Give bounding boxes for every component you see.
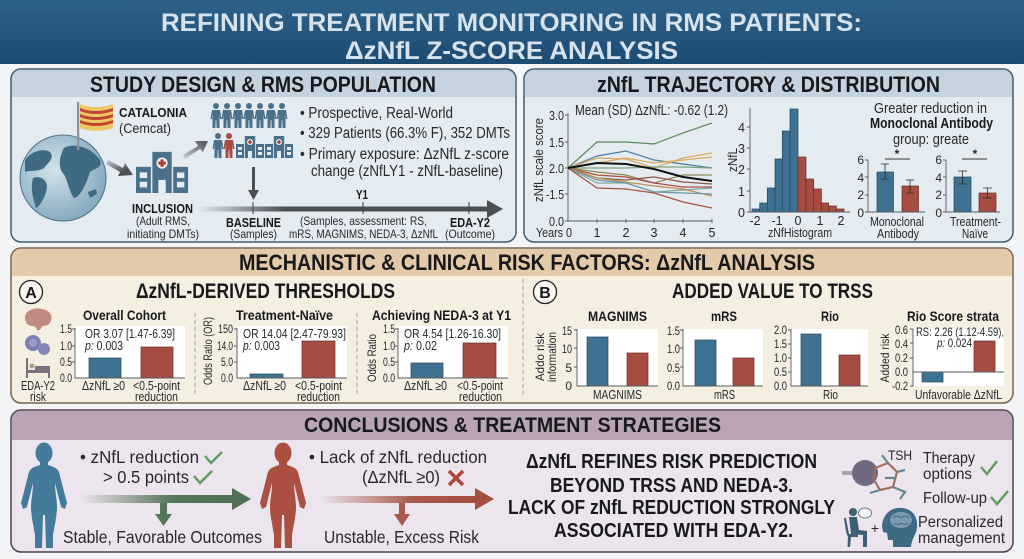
badge A <box>20 280 42 304</box>
bar chart: monoclonal antibody: 0 <box>857 206 864 220</box>
chart: overall cohort: 0.0 <box>60 371 72 385</box>
text: study characteristics: change (zNfLY1 - zNfL-baseline) <box>311 163 503 180</box>
text: baseline: (Samples) <box>230 227 277 241</box>
text: key conclusion: LACK OF zNfL REDUCTION STRONGLY <box>508 496 835 519</box>
text: Catalonia <box>119 105 188 136</box>
histogram: zNfL distribution: 1 <box>817 214 824 228</box>
histogram: zNfL distribution: 0 <box>738 206 745 220</box>
icon: patient in chair <box>844 508 872 547</box>
text: key conclusion: ΔzNfL REFINES RISK PREDICTION <box>526 450 817 473</box>
chart: mRS: 0.0 <box>667 379 680 393</box>
chart: overall cohort: Overall Cohort <box>83 307 166 323</box>
arrow: patients to baseline <box>248 167 259 200</box>
text: inclusion: INCLUSION <box>132 201 193 216</box>
chart: Rio score strata: 0.2 <box>895 351 908 365</box>
chart: treatment-naive odds: 0.0 <box>221 371 233 385</box>
panel: study design and RMS population <box>11 69 516 242</box>
bar chart: treatment-naive <box>935 147 1001 241</box>
histogram: zNfL distribution: zNfL <box>726 148 740 172</box>
chart: MAGNIMS: MAGNIMS <box>593 388 642 402</box>
bar chart: treatment-naive: Naïve <box>962 227 988 241</box>
line chart: zNfL trajectories: Mean (SD) ΔzNfL: -0.62 (1.2) <box>575 103 728 119</box>
bar chart: monoclonal antibody: Monoclonal <box>870 215 924 229</box>
chart: achieving NEDA-3 at Y1: <0.5-point <box>457 379 503 393</box>
text: study characteristics: • Prospective, Real-World <box>300 105 453 122</box>
chart: achieving NEDA-3 at Y1: p: 0.02 <box>403 339 437 353</box>
chart: Rio: Rio <box>821 308 839 324</box>
line chart: zNfL trajectories: 2.0 <box>549 161 564 176</box>
chart: Rio: Rio <box>823 388 838 402</box>
text: inclusion <box>127 201 199 241</box>
chart: MAGNIMS <box>533 308 658 402</box>
text: excess risk: Unstable, Excess Risk <box>324 527 479 547</box>
line chart: zNfL trajectories: -1.5 <box>546 187 564 202</box>
chart: achieving NEDA-3 at Y1: 0.0 <box>383 371 395 385</box>
text: plus: + <box>871 520 879 536</box>
text: greater reduction <box>870 101 993 148</box>
chart: treatment-naive odds: 150 <box>218 322 233 336</box>
heading: study design: STUDY DESIGN & RMS POPULATION <box>90 72 436 97</box>
chart: Rio: 0.5 <box>774 365 787 379</box>
chart: mRS: 1.5 <box>667 324 680 338</box>
histogram: zNfL distribution: zNfHistogram <box>768 226 832 240</box>
chart: Rio: 1.0 <box>774 351 787 365</box>
text: lack of reduction: (ΔzNfL ≥0) <box>362 467 440 487</box>
chart: MAGNIMS: 10 <box>562 342 572 356</box>
text: inclusion: (Adult RMS, <box>136 214 190 228</box>
chart: Rio score strata: 0.4 <box>895 337 908 351</box>
chart: overall cohort <box>60 307 185 404</box>
chart: overall cohort: <0.5-point <box>133 379 180 393</box>
chart: treatment-naive odds: Treatment-Naïve <box>236 307 333 323</box>
bar chart: monoclonal antibody: 4 <box>857 171 864 185</box>
badge B: B <box>539 285 551 302</box>
chart: achieving NEDA-3 at Y1: OR 4.54 [1.26-16.30] <box>404 327 501 341</box>
line chart: zNfL trajectories: 0.0 <box>549 214 564 229</box>
text: therapy options <box>923 450 997 483</box>
chart: mRS: 0.5 <box>667 361 680 375</box>
chart: mRS: mRS <box>711 308 737 324</box>
chart: treatment-naive odds: 5.0 <box>221 355 233 369</box>
chart: treatment-naive odds: Odds Ratio (OR) <box>201 317 215 385</box>
chart: achieving NEDA-3 at Y1: ΔzNfL ≥0 <box>404 379 447 393</box>
arrow: favorable path <box>80 488 251 526</box>
chart: overall cohort: 0.5 <box>60 355 72 369</box>
text: lack of reduction: • Lack of zNfL reduction <box>309 447 487 467</box>
histogram: zNfL distribution: 4 <box>738 121 745 135</box>
chart: treatment-naive odds: <0.5-point <box>295 379 342 393</box>
chart: MAGNIMS: information <box>545 332 559 382</box>
chart: MAGNIMS: Addo risk <box>533 332 547 381</box>
arrow: hospital to patients <box>183 141 208 159</box>
text: inclusion: initiating DMTs) <box>127 227 199 241</box>
bar chart: treatment-naive: 4 <box>935 171 942 185</box>
text: study characteristics <box>300 105 510 180</box>
text: therapy options: Therapy <box>923 450 975 467</box>
text: greater reduction: Monoclonal Antibody <box>870 116 993 132</box>
heading: added value: ADDED VALUE TO TRSS <box>672 280 873 303</box>
icon: Catalonia flag <box>77 102 113 150</box>
bar chart: treatment-naive: 0 <box>935 206 942 220</box>
text: zNfL reduction: • zNfL reduction <box>80 447 199 467</box>
chart: overall cohort: 1.5 <box>60 322 72 336</box>
panel: mechanistic and clinical risk factors <box>11 248 1013 404</box>
chart: MAGNIMS: 5 <box>565 361 572 375</box>
histogram: zNfL distribution: 0 <box>795 214 802 228</box>
text: favorable outcome: Stable, Favorable Outcomes <box>63 527 262 547</box>
chart: Rio score strata: Rio Score strata <box>907 308 999 324</box>
icon: patient group <box>210 103 293 158</box>
chart: achieving NEDA-3 at Y1: 1.5 <box>383 322 395 336</box>
text: Y1 assessments: (Samples, assessment: RS, <box>300 214 427 228</box>
chart: mRS: mRS <box>714 388 735 402</box>
chart: overall cohort: ΔzNfL ≥0 <box>82 379 125 393</box>
histogram: zNfL distribution: 2 <box>838 214 845 228</box>
text: lack of reduction <box>309 447 487 487</box>
icons: EDA-Y2 risk: risk <box>30 390 47 404</box>
chart: Rio: 0.0 <box>774 379 787 393</box>
bar chart: monoclonal antibody: 6 <box>857 153 864 167</box>
heading: conclusions: CONCLUSIONS & TREATMENT STRATEGIES <box>304 414 721 437</box>
text: Y1 assessments: Y1 <box>356 187 368 202</box>
title banner: REFINING TREATMENT MONITORING IN RMS PATIENTS: <box>161 9 862 37</box>
text: Catalonia: (Cemcat) <box>119 120 171 136</box>
arrow: globe to hospital <box>106 160 133 176</box>
line chart: zNfL trajectories: zNfL scale score <box>532 118 546 202</box>
chart: overall cohort: 1.0 <box>60 339 72 353</box>
text: personalized management: management <box>918 530 1006 547</box>
chart: treatment-naive odds: p: 0.003 <box>242 339 280 353</box>
arrow: excess risk path <box>320 488 494 526</box>
icon: hospital <box>136 152 188 193</box>
bar chart: monoclonal antibody <box>857 147 925 241</box>
line chart: zNfL trajectories <box>532 103 728 240</box>
chart: Rio <box>774 308 868 402</box>
line chart: zNfL trajectories: 3 <box>651 226 658 240</box>
chart: Rio: 2.0 <box>774 323 787 337</box>
text: greater reduction: group: greate <box>893 132 969 148</box>
bar chart: treatment-naive: 6 <box>935 153 942 167</box>
chart: treatment-naive odds <box>201 307 347 404</box>
line chart: zNfL trajectories: 2 <box>623 226 630 240</box>
chart: Rio score strata: -0.2 <box>892 379 908 393</box>
text: EDA-Y2 outcome <box>445 215 495 241</box>
bar chart: monoclonal antibody: Antibody <box>877 227 920 241</box>
text: follow-up: Follow-up <box>923 490 987 507</box>
line chart: zNfL trajectories: 1.5 <box>549 135 564 150</box>
icon: molecule and TSH <box>842 447 912 499</box>
chart: achieving NEDA-3 at Y1: 1.0 <box>383 339 395 353</box>
text: key conclusion: BEYOND TRSS AND NEDA-3. <box>550 474 793 497</box>
text: study characteristics: • Primary exposure: ΔzNfL z-score <box>300 146 509 163</box>
text: personalized management: Personalized <box>918 514 1003 531</box>
chart: MAGNIMS: 0 <box>565 379 572 393</box>
histogram: zNfL distribution <box>726 108 850 240</box>
heading: derived thresholds: ΔzNfL-DERIVED THRESHOLDS <box>136 280 395 303</box>
text: key conclusion <box>508 450 835 542</box>
chart: Rio: 1.5 <box>774 337 787 351</box>
icon: globe <box>20 135 106 221</box>
text: EDA-Y2 outcome: EDA-Y2 <box>450 215 490 230</box>
chart: treatment-naive odds: 14.0 <box>217 339 233 353</box>
histogram: zNfL distribution: -2 <box>749 214 761 228</box>
chart: overall cohort: p: 0.003 <box>84 339 123 353</box>
text: Y1 assessments <box>289 187 438 241</box>
histogram: zNfL distribution: -1 <box>771 214 783 228</box>
figure: stable patient <box>21 442 67 548</box>
panel: conclusions and treatment strategies <box>11 410 1013 552</box>
chart: Rio score strata: 0.0 <box>895 365 908 379</box>
text: study characteristics: • 329 Patients (66.3% F), 352 DMTs <box>300 125 510 142</box>
icons: EDA-Y2 risk <box>21 308 55 404</box>
chart: overall cohort: reduction <box>135 390 178 404</box>
chart: treatment-naive odds: OR 14.04 [2.47-79.93] <box>243 327 346 341</box>
chart: MAGNIMS: 15 <box>562 324 572 338</box>
chart: treatment-naive odds: reduction <box>297 390 340 404</box>
chart: Rio score strata: 0.6 <box>895 323 908 337</box>
chart: mRS <box>667 308 763 402</box>
bar chart: treatment-naive: 2 <box>935 188 942 202</box>
icon: molecule and TSH: TSH <box>888 447 912 463</box>
timeline arrow <box>197 200 503 218</box>
figure: unstable patient <box>260 442 306 548</box>
histogram: zNfL distribution: 2 <box>738 163 745 177</box>
badge B <box>534 280 556 304</box>
bar chart: monoclonal antibody: 2 <box>857 188 864 202</box>
title banner: ΔzNfL Z-SCORE ANALYSIS <box>345 37 678 65</box>
text: Y1 assessments: mRS, MAGNIMS, NEDA-3, ΔzNfL <box>289 227 438 241</box>
text: zNfL reduction <box>80 447 222 487</box>
text: greater reduction: Greater reduction in <box>874 101 987 117</box>
bar chart: treatment-naive: * <box>973 147 978 161</box>
histogram: zNfL distribution: 3 <box>738 142 745 156</box>
text: Catalonia: CATALONIA <box>119 105 188 120</box>
text: baseline: BASELINE <box>226 215 281 230</box>
heading: trajectory: zNfL TRAJECTORY & DISTRIBUTION <box>597 72 940 97</box>
line chart: zNfL trajectories: 3.0 <box>549 108 564 123</box>
line chart: zNfL trajectories: 1 <box>594 226 601 240</box>
chart: achieving NEDA-3 at Y1 <box>365 307 511 404</box>
chart: MAGNIMS: MAGNIMS <box>588 308 647 324</box>
histogram: zNfL distribution: 1 <box>738 185 745 199</box>
bar chart: treatment-naive: Treatment- <box>950 215 1001 229</box>
icons: EDA-Y2 risk: EDA-Y2 <box>21 379 55 393</box>
text: personalized management <box>918 514 1006 547</box>
chart: Rio score strata: Unfavorable ΔzNfL <box>915 388 1002 402</box>
badge A: A <box>25 285 37 302</box>
icon: head with brain <box>882 508 917 547</box>
heading: risk factors: MECHANISTIC & CLINICAL RISK FACTORS: ΔzNfL ANALYSIS <box>239 250 815 275</box>
chart: achieving NEDA-3 at Y1: Achieving NEDA-3 at Y1 <box>372 307 511 323</box>
chart: Rio score strata: p: 0.024 <box>936 336 972 350</box>
text: key conclusion: ASSOCIATED WITH EDA-Y2. <box>554 519 793 542</box>
chart: achieving NEDA-3 at Y1: Odds Ratio <box>365 334 379 382</box>
chart: achieving NEDA-3 at Y1: 0.5 <box>383 355 395 369</box>
title banner <box>0 0 1024 65</box>
line chart: zNfL trajectories: Years 0 <box>536 225 572 240</box>
chart: Rio score strata <box>878 308 1004 402</box>
line chart: zNfL trajectories: 5 <box>709 226 716 240</box>
line chart: zNfL trajectories: 4 <box>680 226 687 240</box>
text: baseline <box>226 215 281 241</box>
chart: treatment-naive odds: ΔzNfL ≥0 <box>243 379 286 393</box>
text: zNfL reduction: > 0.5 points <box>103 467 189 487</box>
chart: achieving NEDA-3 at Y1: reduction <box>459 390 502 404</box>
chart: overall cohort: OR 3.07 [1.47-6.39] <box>85 327 175 341</box>
chart: mRS: 1.0 <box>667 342 680 356</box>
bar chart: monoclonal antibody: * <box>895 147 900 161</box>
panel: zNfL trajectory and distribution <box>524 69 1013 242</box>
chart: Rio score strata: Added risk <box>878 333 892 382</box>
text: EDA-Y2 outcome: (Outcome) <box>445 227 495 241</box>
text: therapy options: options <box>923 466 972 483</box>
